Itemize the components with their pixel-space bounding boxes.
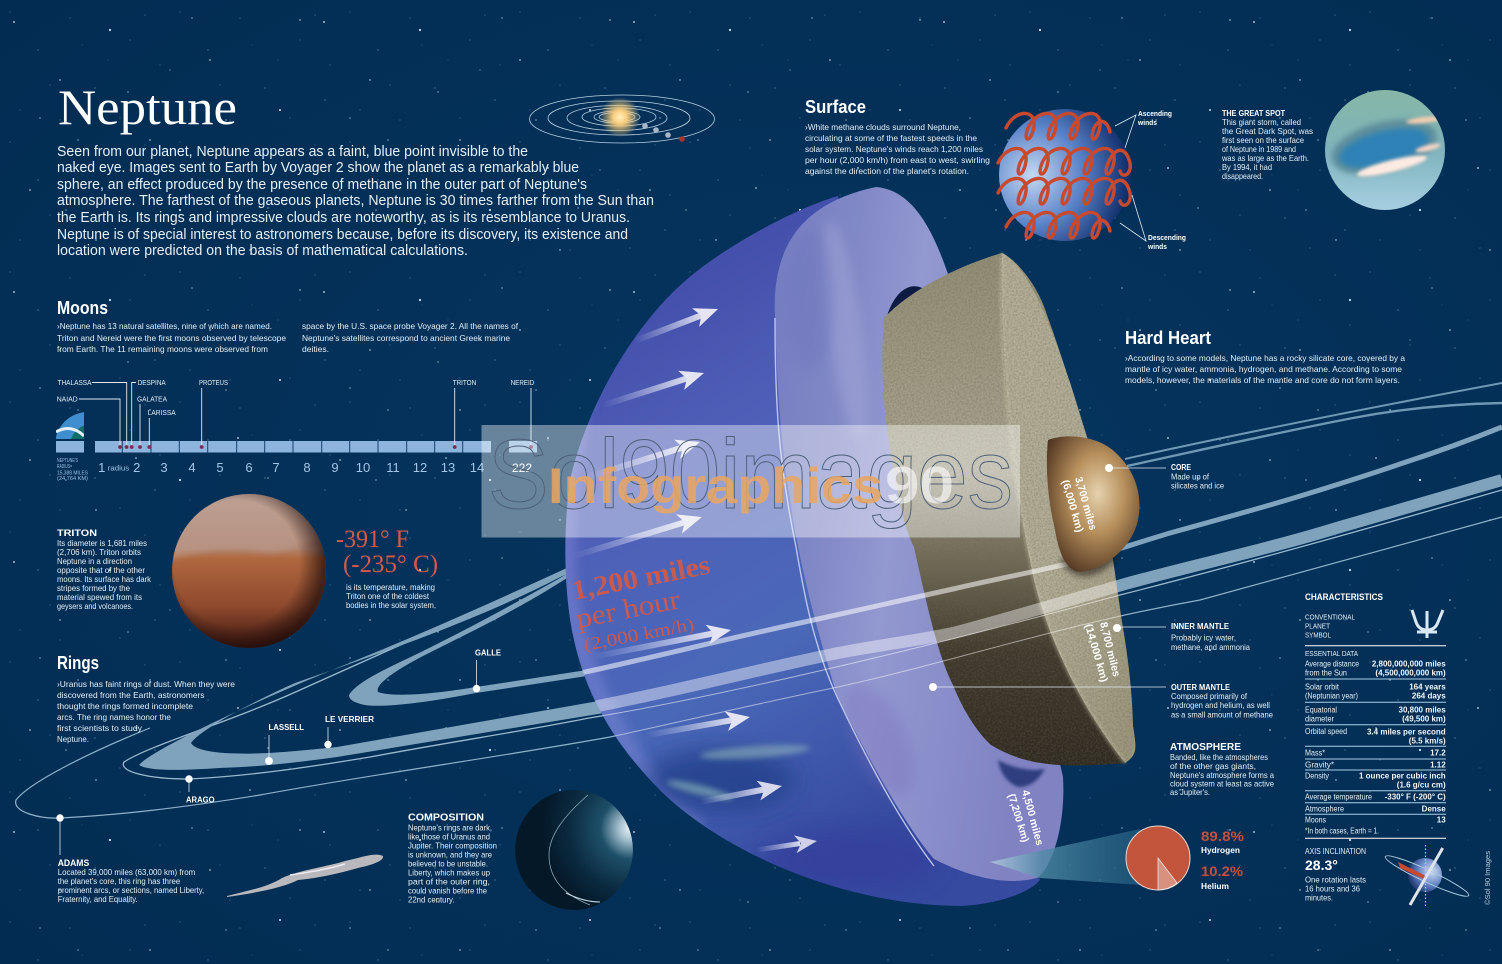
moon distance scale: 14 — [470, 460, 484, 475]
moon distance scale: 10 — [356, 460, 370, 475]
moon distance scale: RADIUS= — [57, 464, 72, 470]
intro paragraph: atmosphere. The farthest of the gaseous planets, Neptune is 30 times farther from the Sun than — [57, 193, 654, 209]
panel: surface text: Surface — [805, 97, 866, 117]
panel: surface text: circulating at some of the fastest speeds in the — [805, 133, 977, 143]
essential data table: 164 years — [1409, 682, 1446, 691]
panel: rings text — [57, 653, 235, 744]
core — [1047, 436, 1139, 576]
moon distance scale: 7 — [272, 460, 280, 475]
rings: Galle ring — [349, 555, 600, 706]
intro paragraph: Seen from our planet, Neptune appears as a faint, blue point invisible to the — [57, 144, 528, 160]
triton temperature callout — [336, 526, 438, 610]
icon: tilted globe — [1383, 845, 1471, 908]
panel: surface text — [805, 97, 990, 176]
essential data table: 264 days — [1412, 691, 1446, 700]
triton temperature callout: is its temperature, making — [346, 582, 435, 592]
panel: composition text: Jupiter. Their composition — [408, 840, 497, 850]
panel: composition text: could vanish before the — [408, 885, 487, 895]
panel: adams text: Located 39,000 miles (63,000 km) from — [58, 867, 195, 877]
triton temperature callout: Triton one of the coldest — [346, 591, 430, 601]
wind globe diagram: winds — [1147, 242, 1167, 251]
wind globe diagram: Ascending — [1138, 109, 1172, 118]
wind globe diagram: Descending — [1148, 233, 1186, 242]
panel: the great spot text: was as large as the Earth. — [1221, 153, 1309, 163]
essential data table: Average distance — [1305, 660, 1359, 669]
essential data table: Moons — [1305, 816, 1326, 825]
essential data table: 17.2 — [1430, 749, 1446, 758]
pie chart: atmosphere composition: 89.8% — [1201, 828, 1245, 844]
wind speed callout: 1,200 miles — [569, 550, 713, 607]
panel: the great spot text: By 1994, it had — [1222, 162, 1272, 172]
intro paragraph: naked eye. Images sent to Earth by Voyager 2 show the planet as a remarkably blue — [57, 160, 579, 176]
moon distance scale: NAIAD — [57, 396, 78, 404]
panel: the great spot text: THE GREAT SPOT — [1222, 109, 1285, 118]
panel: triton text: (2,706 km). Triton orbits — [57, 547, 141, 557]
panel: characteristics — [1305, 592, 1471, 908]
panel: rings text: Rings — [57, 653, 99, 673]
layer callouts: silicates and ice — [1171, 480, 1224, 490]
inner mantle gray block — [880, 250, 1140, 770]
moon distance scale: 13 — [441, 460, 455, 475]
moon distance scale: 6 — [245, 460, 253, 475]
outer atmosphere shell — [565, 196, 1040, 906]
intro paragraph: location were predicted on the basis of mathematical calculations. — [57, 243, 468, 259]
panel: atmosphere text: of the other gas giants, — [1170, 761, 1256, 771]
moon distance scale: 222 — [512, 461, 532, 475]
essential data table: 30,800 miles — [1399, 706, 1446, 715]
pie chart: atmosphere composition — [990, 826, 1245, 891]
layer callouts — [929, 463, 1273, 720]
essential data table: Equatorial — [1305, 706, 1337, 715]
title: Neptune — [58, 79, 237, 135]
panel: triton text: TRITON — [57, 528, 97, 539]
wind globe diagram — [998, 109, 1186, 251]
panel: moons: Triton and Nereid were the first moons observed by telescope — [57, 333, 286, 343]
essential data table: 3.4 miles per second — [1367, 728, 1446, 736]
essential data table: -330° F (-200° C) — [1385, 792, 1446, 801]
panel: atmosphere text: as Jupiter's. — [1170, 787, 1210, 797]
panel: composition text: like those of Uranus and — [408, 832, 490, 842]
panel: moons — [57, 298, 519, 354]
panel: the great spot text: first seen on the surface — [1222, 135, 1304, 145]
moon distance scale: 15,388 MILES — [57, 470, 88, 476]
panel: hard heart text: ›According to some models, Neptune has a rocky silicate core, covered by a — [1125, 353, 1405, 363]
dimension labels: 4,500 miles — [1019, 789, 1045, 847]
panel: rings text: arcs. The ring names honor the — [57, 712, 171, 722]
moon distance scale: 2 — [133, 460, 140, 475]
rings: Arago thin ring — [123, 490, 1502, 779]
essential data table: from the Sun — [1305, 669, 1347, 678]
dimension labels: (6,000 km) — [1059, 479, 1086, 534]
panel: surface text: ›White methane clouds surround Neptune, — [805, 122, 961, 132]
axis inclination: minutes. — [1305, 893, 1333, 903]
panel: surface text: against the direction of the planet's rotation. — [805, 166, 969, 176]
rings: Lassell and Le Verrier wide ring — [139, 548, 610, 770]
panel: rings text: ›Uranus has faint rings of dust. When they were — [57, 679, 235, 689]
panel: hard heart text — [1125, 328, 1405, 385]
panel: triton text: stripes formed by the — [57, 583, 130, 593]
wind speed callout: (2,000 km/h) — [582, 614, 696, 656]
axis inclination: AXIS INCLINATION — [1305, 847, 1366, 856]
panel: atmosphere text: Banded, like the atmospheres — [1170, 752, 1268, 762]
panel: adams text: prominent arcs, or sections, named Liberty, — [58, 885, 204, 895]
copyright: ©Sol 90 Images — [1484, 850, 1492, 905]
ring labels — [56, 648, 502, 855]
panel: surface text: solar system. Neptune's winds reach 1,200 miles — [805, 144, 983, 154]
ring system — [16, 383, 1502, 818]
intro paragraph: Neptune is of special interest to astronomers because, before its discovery, its existence and — [57, 227, 628, 243]
panel: triton text: Neptune in a direction — [57, 556, 132, 566]
panel: surface text: per hour (2,000 km/h) from east to west, swirling — [805, 155, 990, 165]
watermark banner: 90 — [885, 457, 954, 515]
wind globe diagram: winds — [1137, 118, 1157, 127]
essential data table: (Neptunian year) — [1305, 691, 1358, 700]
essential data table: diameter — [1305, 715, 1334, 724]
ring labels: GALLE — [475, 648, 502, 658]
wind speed callout: per hour — [573, 584, 683, 635]
panel: rings text: Neptune. — [57, 734, 89, 744]
dimension labels: (7,200 km) — [1005, 792, 1031, 844]
intro paragraph: sphere, an effect produced by the presence of methane in the outer part of Neptune's — [57, 177, 587, 193]
arrows: wind direction — [571, 300, 818, 859]
essential data table: (5.5 km/s) — [1409, 737, 1446, 746]
moon distance scale: THALASSA — [58, 380, 92, 387]
great spot planet — [1325, 90, 1445, 210]
moon distance scale: LARISSA — [148, 410, 176, 417]
panel: rings text: first scientists to study — [57, 723, 143, 733]
ring fragment illustration — [227, 855, 383, 897]
essential data table: 1.12 — [1430, 760, 1446, 769]
layer callouts: CORE — [1171, 463, 1192, 472]
essential data table: Density — [1305, 771, 1329, 780]
panel: moons: ›Neptune has 13 natural satellites, nine of which are named. — [57, 321, 272, 331]
panel: composition text — [408, 812, 497, 904]
moon distance scale: 12 — [413, 460, 427, 475]
panel: composition text: Neptune's rings are dark, — [408, 823, 492, 833]
layer callouts: OUTER MANTLE — [1171, 683, 1231, 692]
essential data table: *In both cases, Earth = 1. — [1305, 827, 1379, 836]
essential data table: Average temperature — [1305, 792, 1372, 801]
moon distance scale: 9 — [331, 460, 339, 475]
layer callouts: hydrogen and helium, as well — [1171, 700, 1270, 710]
pie chart: atmosphere composition: Helium — [1201, 881, 1229, 891]
layer callouts: methane, and ammonia — [1171, 642, 1250, 652]
rings crossing planet — [582, 562, 1121, 736]
axis inclination: 28.3° — [1305, 857, 1338, 873]
panel: triton text: geysers and volcanoes. — [57, 601, 133, 611]
panel: atmosphere text: ATMOSPHERE — [1170, 741, 1241, 753]
panel: characteristics: PLANET — [1305, 622, 1330, 630]
moon distance scale: NEREID — [511, 380, 534, 387]
moon distance scale: 8 — [303, 460, 311, 475]
dimension labels: (14,000 km) — [1082, 623, 1110, 684]
axis inclination — [1305, 845, 1471, 908]
moon distance scale: 3 — [160, 460, 168, 475]
ring labels: LASSELL — [268, 723, 304, 732]
moon distance scale: TRITON — [453, 380, 476, 387]
panel: adams text: the planet's core, this ring has three — [58, 876, 180, 886]
essential data table: Orbital speed — [1305, 727, 1347, 736]
triton temperature callout: (-235° C) — [343, 551, 438, 578]
layer callouts: Made up of — [1171, 472, 1210, 482]
triton planet — [170, 490, 330, 650]
panel: the great spot text: of Neptune in 1989 and — [1222, 144, 1296, 154]
panel: triton text: moons. Its surface has dark — [57, 574, 152, 584]
rings: outer pair at right — [1125, 383, 1502, 459]
panel: characteristics: CHARACTERISTICS — [1305, 592, 1383, 602]
dimension labels: 8,700 miles — [1097, 621, 1122, 678]
intro paragraph — [57, 144, 654, 259]
panel: composition text: believed to be unstable. — [408, 858, 488, 868]
panel: composition text: is unknown, and they are — [408, 849, 492, 859]
panel: triton text — [57, 528, 152, 611]
panel: triton text: opposite that of the other — [57, 565, 145, 575]
panel: atmosphere text — [1170, 741, 1274, 797]
layer callouts: as a small amount of methane — [1171, 710, 1273, 720]
moon distance scale: radius — [108, 466, 130, 472]
panel: moons: space by the U.S. space probe Voyager 2. All the names of — [302, 321, 519, 331]
essential data table: Solar orbit — [1305, 682, 1340, 691]
panel: triton text: material spewed from its — [57, 592, 142, 602]
panel: composition text: 22nd century. — [408, 894, 454, 904]
essential data table: (1.6 g/cu cm) — [1397, 780, 1446, 789]
essential data table: Mass* — [1305, 749, 1325, 758]
panel: hard heart text: mantle of icy water, ammonia, hydrogen, and methane. According to some — [1125, 364, 1402, 374]
solar system diagram — [530, 95, 714, 143]
essential data table: (4,500,000,000 km) — [1375, 669, 1446, 678]
rings: Adams thin ring — [16, 517, 1502, 818]
panel: atmosphere text: cloud system at least as active — [1170, 778, 1274, 788]
panel: characteristics: SYMBOL — [1305, 630, 1331, 640]
panel: moons: from Earth. The 11 remaining moons were observed from — [57, 344, 268, 354]
panel: rings text: discovered from the Earth, astronomers — [57, 690, 204, 700]
wind speed callout — [569, 550, 713, 656]
moon distance scale: NEPTUNE'S — [57, 458, 78, 464]
composition planet — [515, 790, 633, 910]
triton temperature callout: -391° F — [336, 526, 409, 553]
panel: adams text: Fraternity, and Equality. — [58, 894, 138, 904]
icon: neptune symbol — [1412, 610, 1443, 638]
layer callouts: Probably icy water, — [1171, 632, 1236, 642]
panel: the great spot text: This giant storm, called — [1222, 117, 1301, 127]
pie chart: atmosphere composition: Hydrogen — [1201, 845, 1240, 855]
ring labels: ARAGO — [186, 796, 215, 805]
essential data table — [1305, 649, 1446, 836]
panel: moons: Moons — [57, 298, 108, 318]
essential data table: Dense — [1422, 805, 1446, 814]
panel: rings text: thought the rings formed incomplete — [57, 701, 193, 711]
dimension labels: 3,700 miles — [1072, 476, 1099, 532]
icon: neptune radius thumbnail — [56, 412, 84, 439]
panel: hard heart text: models, however, the materials of the mantle and core do not form layers. — [1125, 375, 1400, 385]
moon distance scale: 4 — [188, 460, 196, 475]
ring labels: LE VERRIER — [325, 715, 374, 724]
panel: the great spot text: disappeared. — [1222, 171, 1263, 181]
essential data table: (49,500 km) — [1402, 715, 1446, 724]
panel: hard heart text: Hard Heart — [1125, 328, 1211, 348]
moon distance scale: PROTEUS — [199, 380, 228, 387]
panel: moons: deities. — [302, 344, 329, 354]
intro paragraph: the Earth is. Its rings and impressive clouds are noteworthy, as is its resemblance to Uranus. — [57, 210, 630, 226]
essential data table: 1 ounce per cubic inch — [1359, 771, 1446, 780]
panel: composition text: COMPOSITION — [408, 812, 484, 824]
panel: atmosphere text: Neptune's atmosphere forms a — [1170, 770, 1274, 780]
moon distance scale: 1 — [98, 460, 105, 475]
axis inclination: One rotation lasts — [1305, 875, 1366, 885]
moon distance scale: GALATEA — [137, 396, 167, 404]
panel: the great spot text — [1221, 109, 1313, 181]
watermark banner: Infographics — [548, 458, 883, 514]
essential data table: Atmosphere — [1305, 805, 1344, 814]
layer callouts: INNER MANTLE — [1171, 622, 1230, 631]
moon distance scale: 11 — [386, 460, 400, 475]
outer mantle torus — [775, 187, 1063, 881]
essential data table: ESSENTIAL DATA — [1305, 649, 1358, 658]
watermark banner: Sol90images — [488, 419, 1013, 529]
dark hollow around mantle — [884, 286, 935, 350]
moon distance scale — [55, 380, 537, 482]
panel: adams text — [58, 858, 204, 904]
triton temperature callout: bodies in the solar system. — [346, 600, 436, 610]
moon distance scale: (24,764 KM) — [57, 476, 88, 482]
panel: composition text: Liberty, which makes up — [408, 867, 490, 877]
panel: adams text: ADAMS — [58, 858, 89, 868]
essential data table: Gravity* — [1305, 760, 1334, 769]
panel: composition text: part of the outer ring, — [408, 876, 490, 886]
pie chart: atmosphere composition: 10.2% — [1201, 863, 1244, 879]
neptune cross section — [565, 187, 1140, 906]
layer callouts: Composed primarily of — [1171, 691, 1248, 701]
panel: moons: Neptune's satellites correspond to ancient Greek marine — [302, 333, 510, 343]
panel: triton text: Its diameter is 1,681 miles — [57, 538, 147, 548]
essential data table: 2,800,000,000 miles — [1372, 660, 1446, 669]
moon distance scale: DESPINA — [138, 380, 166, 387]
panel: characteristics: CONVENTIONAL — [1305, 612, 1355, 622]
moon distance scale: 5 — [216, 460, 224, 475]
axis inclination: 16 hours and 36 — [1305, 884, 1360, 894]
essential data table: 13 — [1437, 816, 1446, 825]
dimension labels — [1005, 476, 1122, 847]
panel: the great spot text: the Great Dark Spot, was — [1222, 126, 1313, 136]
